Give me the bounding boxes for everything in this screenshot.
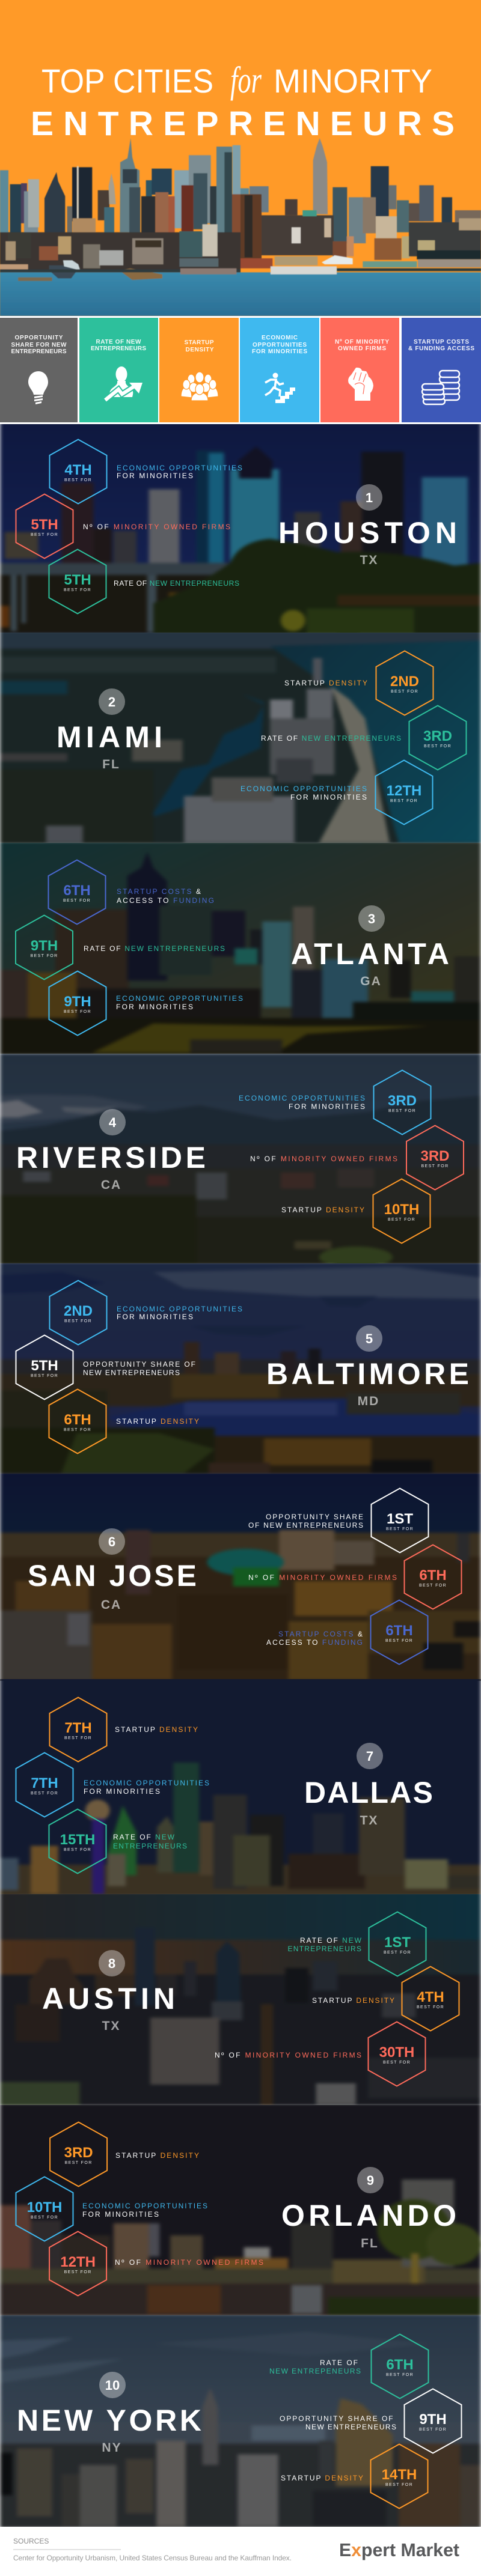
city name: Baltimore: BALTIMORE	[266, 1357, 469, 1391]
label: opportunity share: OPPORTUNITY SHARE OF	[280, 2414, 393, 2423]
panel: Orlando	[0, 2103, 481, 2317]
panel: Houston	[0, 421, 481, 638]
hex: 9th economic opportunities	[49, 971, 106, 1036]
city name: Miami: MIAMI	[57, 720, 162, 754]
right half	[240, 138, 481, 275]
hex: 14th startup density: BEST FOR	[385, 2483, 413, 2487]
hex: 1st opportunity share	[372, 1489, 428, 1552]
icon: raised fist	[348, 368, 373, 401]
label: economic opportunities: ECONOMIC OPPORTUNITIES	[82, 2202, 207, 2210]
tile: startup costs and funding	[402, 318, 481, 422]
hex: 5th opportunity share: 5TH	[31, 1358, 58, 1374]
label: opportunity share	[248, 1513, 363, 1530]
left half	[0, 170, 8, 242]
hex: 6th rate of new entrepreneurs	[372, 2334, 428, 2398]
tile: opportunity share: SHARE FOR NEW	[11, 342, 67, 348]
hex: 3rd minority firms	[406, 1126, 464, 1189]
label: startup costs and funding: STARTUP COSTS &	[117, 887, 201, 896]
hex: 1st opportunity share: 1ST	[387, 1511, 413, 1527]
tile: economic opportunities: OPPORTUNITIES	[253, 342, 307, 348]
hex: 10th startup density	[373, 1179, 430, 1244]
rank badge 7: 7	[366, 1749, 373, 1764]
hex: 3rd economic opportunities: BEST FOR	[388, 1109, 416, 1113]
logo: Expert Market: Expert Market	[339, 2539, 459, 2560]
hex: 6th rate of new entrepreneurs: BEST FOR	[386, 2373, 414, 2377]
sources: Center for Opportunity Urbanism, United States Census Bureau and the Kauffman Index.	[13, 2554, 292, 2562]
hero panel	[0, 0, 481, 316]
sources	[13, 2537, 292, 2562]
label: opportunity share: OPPORTUNITY SHARE OF	[83, 1360, 195, 1368]
hex: 2nd economic opportunities	[49, 1281, 107, 1344]
label: rate of new entrepreneurs: RATE OF NEW ENTREPRENEURS	[114, 579, 239, 588]
hex: 14th startup density	[370, 2444, 428, 2509]
hex: 12th minority firms: 12TH	[60, 2254, 96, 2270]
icon: person climbing stairs	[265, 372, 295, 403]
hex: 3rd minority firms: 3RD	[420, 1148, 450, 1164]
label: economic opportunities	[239, 1094, 365, 1111]
hex: 12th economic opportunities: 12TH	[387, 783, 421, 799]
title: ENTREPRENEURS	[31, 105, 455, 143]
hex: 3rd economic opportunities: 3RD	[388, 1093, 417, 1109]
Orlando photo	[0, 2105, 481, 2315]
label: economic opportunities: FOR MINORITIES	[290, 793, 367, 801]
label: startup costs and funding: ACCESS TO FUNDING	[117, 896, 214, 905]
tile: opportunity share: ENTREPRENEURS	[11, 348, 67, 355]
hex: 30th minority firms: 30TH	[379, 2044, 414, 2061]
tile: startup density: DENSITY	[185, 347, 214, 353]
hex: 5th rate of new entrepreneurs: BEST FOR	[64, 588, 91, 592]
hex: 7th economic opportunities	[16, 1753, 73, 1817]
panel: Dallas	[0, 1677, 481, 1897]
city name: Houston	[278, 516, 457, 567]
label: minority owned firms: Nº OF MINORITY OWNED FIRMS	[250, 1155, 397, 1163]
panel: Atlanta	[0, 841, 481, 1056]
hex: 15th rate of new entrepreneurs: BEST FOR	[64, 1848, 91, 1852]
hex: 9th opportunity share	[404, 2389, 462, 2453]
label: economic opportunities	[84, 1779, 209, 1796]
tile: economic opportunities: ECONOMIC	[262, 335, 298, 341]
city name: Houston: TX	[360, 553, 378, 567]
hex: 4th economic opportunities	[49, 440, 107, 503]
hex: 9th rate of new entrepreneurs: BEST FOR	[30, 954, 58, 958]
New York photo	[0, 2315, 481, 2527]
rank badge 4: 4	[109, 1115, 117, 1130]
label: opportunity share: OF NEW ENTREPRENEURS	[248, 1521, 363, 1530]
panel: Riverside	[0, 1053, 481, 1268]
label: opportunity share	[83, 1360, 195, 1377]
hex: 4th economic opportunities: 4TH	[64, 462, 92, 478]
label: economic opportunities: FOR MINORITIES	[116, 1003, 193, 1011]
label: rate of new entrepreneurs: RATE OF	[320, 2359, 358, 2367]
rank badge 9	[357, 2167, 384, 2193]
city name: Dallas: TX	[360, 1814, 378, 1827]
hex: 4th startup density: BEST FOR	[417, 2005, 444, 2009]
label: economic opportunities: FOR MINORITIES	[117, 1313, 193, 1321]
label: economic opportunities	[117, 1305, 242, 1321]
hex: 14th startup density: 14TH	[382, 2467, 417, 2483]
hex: 1st opportunity share: BEST FOR	[386, 1527, 414, 1531]
hex: 3rd startup density	[50, 2122, 107, 2187]
Dallas photo	[0, 1679, 481, 1894]
label: economic opportunities: FOR MINORITIES	[82, 2210, 159, 2219]
city name: Orlando	[281, 2199, 456, 2250]
panel: Baltimore	[0, 1262, 481, 1476]
label: startup density: STARTUP DENSITY	[115, 1725, 198, 1734]
New York skyline photo	[0, 138, 481, 316]
panel: Miami	[0, 630, 481, 845]
label: rate of new entrepreneurs: RATE OF NEW ENTREPRENEURS	[261, 734, 401, 743]
label: startup density: STARTUP DENSITY	[281, 1206, 364, 1214]
rank badge 8	[99, 1950, 125, 1976]
hex: 2nd startup density	[376, 651, 433, 715]
rank badge 1: 1	[366, 490, 373, 505]
hex: 3rd rate of new entrepreneurs: 3RD	[423, 728, 452, 744]
tile: rate of new entrepreneurs: ENTREPRENEURS	[91, 345, 146, 352]
hex: 2nd startup density: BEST FOR	[391, 690, 418, 694]
hex: 6th startup costs: 6TH	[63, 882, 91, 899]
hex: 10th economic opportunities: 10TH	[27, 2199, 62, 2216]
tile: opportunity share: OPPORTUNITY	[14, 335, 63, 341]
hex: 6th startup costs: 6TH	[385, 1623, 413, 1639]
label: minority owned firms: Nº OF MINORITY OWNED FIRMS	[115, 2258, 263, 2267]
hex: 3rd startup density: BEST FOR	[65, 2161, 93, 2165]
hex: 12th economic opportunities	[375, 761, 433, 824]
label: startup costs and funding: STARTUP COSTS &	[278, 1630, 363, 1638]
hex: 6th startup costs	[370, 1600, 428, 1664]
hex: 9th rate of new entrepreneurs	[16, 916, 73, 979]
panel: San Jose	[0, 1471, 481, 1683]
label: rate of new entrepreneurs: RATE OF NEW	[300, 1936, 362, 1945]
city name: New York: NY	[102, 2441, 122, 2455]
hex: 6th minority firms: 6TH	[419, 1567, 447, 1584]
label: rate of new entrepreneurs	[113, 1833, 187, 1850]
hex: 6th startup costs: BEST FOR	[385, 1639, 413, 1643]
tile: startup density	[159, 318, 239, 422]
city name: Atlanta: GA	[360, 974, 382, 988]
label: opportunity share: NEW ENTREPENEURS	[305, 2423, 396, 2431]
label: startup costs and funding: ACCESS TO FUNDING	[266, 1638, 363, 1647]
title: TOP CITIES	[41, 62, 213, 100]
hex: 2nd economic opportunities: BEST FOR	[64, 1319, 92, 1323]
hex: 5th opportunity share: BEST FOR	[31, 1374, 58, 1378]
hex: 12th minority firms	[49, 2231, 106, 2296]
city name: Austin: TX	[102, 2019, 120, 2033]
label: economic opportunities: ECONOMIC OPPORTUNITIES	[84, 1779, 209, 1787]
label: minority owned firms: Nº OF MINORITY OWNED FIRMS	[83, 523, 230, 531]
rank badge 4	[99, 1109, 126, 1135]
tile: minority owned firms: OWNED FIRMS	[338, 345, 386, 352]
tile: minority owned firms: Nº OF MINORITY	[335, 339, 389, 345]
hex: 7th startup density: BEST FOR	[64, 1736, 92, 1740]
hex: 3rd rate of new entrepreneurs	[409, 705, 467, 770]
rank badge 3	[358, 905, 385, 932]
hex: 5th minority firms: 5TH	[31, 517, 58, 533]
hex: 15th rate of new entrepreneurs	[49, 1809, 106, 1873]
title	[31, 60, 455, 143]
hex: 1st rate of new entrepreneurs	[369, 1912, 426, 1976]
rank badge 9: 9	[367, 2173, 374, 2188]
label: minority owned firms: Nº OF MINORITY OWNED FIRMS	[248, 1573, 397, 1582]
hex: 10th economic opportunities: BEST FOR	[31, 2216, 58, 2220]
title: for	[230, 60, 262, 101]
city name: Austin	[42, 1982, 175, 2033]
city name: Miami	[57, 720, 162, 771]
panel: New York	[0, 2313, 481, 2529]
label: economic opportunities: ECONOMIC OPPORTUNITIES	[240, 785, 367, 793]
hex: 3rd economic opportunities	[374, 1071, 430, 1134]
label: opportunity share: OPPORTUNITY SHARE	[266, 1513, 363, 1521]
hex: 2nd startup density: 2ND	[390, 673, 419, 690]
hex: 6th startup density	[49, 1389, 106, 1454]
hex: 4th startup density: 4TH	[417, 1989, 444, 2005]
city name: Baltimore: MD	[358, 1394, 379, 1408]
hex: 9th opportunity share: 9TH	[419, 2411, 447, 2428]
hex: 4th economic opportunities: BEST FOR	[64, 478, 92, 482]
hex: 6th minority firms	[404, 1545, 462, 1609]
label: economic opportunities: FOR MINORITIES	[117, 472, 193, 480]
label: economic opportunities	[116, 994, 243, 1011]
icon: stacks of coins	[422, 371, 459, 404]
hex: 6th startup density: 6TH	[64, 1412, 91, 1428]
rank badge 5	[356, 1325, 382, 1352]
city name: Dallas	[304, 1776, 433, 1827]
panel: Austin	[0, 1892, 481, 2106]
city name: New York	[17, 2404, 201, 2455]
label: rate of new entrepreneurs: NEW ENTREPENEURS	[269, 2367, 361, 2375]
Atlanta photo	[0, 843, 481, 1054]
hex: 5th minority firms: BEST FOR	[31, 533, 58, 537]
label: economic opportunities: ECONOMIC OPPORTUNITIES	[117, 1305, 242, 1313]
city name: Atlanta	[291, 937, 449, 988]
San Jose photo	[0, 1474, 481, 1681]
label: startup costs and funding	[266, 1630, 363, 1647]
hex: 30th minority firms: BEST FOR	[383, 2061, 411, 2065]
city name: Austin: AUSTIN	[42, 1982, 175, 2016]
icon: person with rising arrow	[105, 366, 142, 400]
hex: 10th economic opportunities	[16, 2177, 73, 2241]
hex: 10th startup density: 10TH	[384, 1201, 419, 1218]
hex: 3rd rate of new entrepreneurs: BEST FOR	[424, 744, 452, 749]
label: rate of new entrepreneurs	[269, 2359, 361, 2375]
hex: 10th startup density: BEST FOR	[388, 1218, 415, 1222]
icon: crowd of people	[181, 372, 218, 401]
hex: 6th rate of new entrepreneurs: 6TH	[386, 2357, 414, 2373]
hex: 3rd startup density: 3RD	[64, 2145, 93, 2161]
hex: 4th startup density	[402, 1967, 459, 2031]
city name: Atlanta: ATLANTA	[291, 937, 449, 971]
hex: 30th minority firms	[368, 2022, 426, 2086]
label: economic opportunities: FOR MINORITIES	[84, 1787, 160, 1796]
label: economic opportunities	[240, 785, 367, 801]
hex: 7th economic opportunities: BEST FOR	[31, 1791, 58, 1796]
label: economic opportunities: ECONOMIC OPPORTUNITIES	[116, 994, 243, 1003]
tile: startup density: STARTUP	[184, 339, 214, 346]
label: rate of new entrepreneurs: RATE OF NEW	[113, 1833, 175, 1841]
rank badge 3: 3	[368, 911, 375, 926]
label: rate of new entrepreneurs: RATE OF NEW ENTREPRENEURS	[84, 944, 225, 953]
label: minority owned firms: Nº OF MINORITY OWNED FIRMS	[215, 2051, 361, 2059]
rank badge 6: 6	[108, 1534, 115, 1549]
footer	[13, 2537, 459, 2562]
hex: 9th economic opportunities: 9TH	[64, 994, 91, 1010]
city name: Houston: HOUSTON	[278, 516, 457, 550]
label: rate of new entrepreneurs	[287, 1936, 362, 1953]
city name: Dallas: DALLAS	[304, 1776, 433, 1809]
hex: 5th minority firms	[16, 494, 73, 559]
rank badge 2: 2	[108, 694, 115, 709]
hex: 7th startup density	[49, 1698, 107, 1761]
tile: startup costs and funding: STARTUP COSTS	[414, 339, 469, 345]
rank badge 2	[99, 688, 125, 715]
rank badge 8: 8	[108, 1956, 115, 1971]
hex: 5th rate of new entrepreneurs: 5TH	[64, 572, 91, 588]
sources: SOURCES	[13, 2537, 49, 2545]
label: startup density: STARTUP DENSITY	[281, 2474, 363, 2482]
city name: Orlando: FL	[361, 2237, 379, 2250]
Miami photo	[0, 633, 481, 843]
hex: 9th opportunity share: BEST FOR	[419, 2428, 447, 2432]
rank badge 6	[99, 1528, 125, 1555]
hex: 1st rate of new entrepreneurs: BEST FOR	[384, 1951, 411, 1955]
hex: 9th rate of new entrepreneurs: 9TH	[31, 938, 58, 954]
hex: 12th minority firms: BEST FOR	[64, 2270, 92, 2274]
label: opportunity share	[280, 2414, 396, 2431]
tile: minority owned firms	[320, 318, 399, 422]
city name: San Jose	[28, 1559, 197, 1612]
city name: Riverside: RIVERSIDE	[16, 1141, 206, 1174]
label: economic opportunities	[117, 464, 242, 480]
label: economic opportunities: ECONOMIC OPPORTUNITIES	[239, 1094, 365, 1102]
tile: rate of new entrepreneurs: RATE OF NEW	[96, 339, 141, 345]
Riverside photo	[0, 1054, 481, 1263]
tile: startup costs and funding: & FUNDING ACCESS	[408, 345, 474, 352]
hex: 2nd economic opportunities: 2ND	[64, 1303, 93, 1319]
hex: 3rd minority firms: BEST FOR	[421, 1164, 449, 1168]
label: startup costs and funding	[117, 887, 214, 905]
label: economic opportunities: ECONOMIC OPPORTUNITIES	[117, 464, 242, 472]
Austin photo	[0, 1894, 481, 2105]
rank badge 10	[99, 2372, 126, 2398]
label: economic opportunities	[82, 2202, 207, 2219]
label: economic opportunities: FOR MINORITIES	[289, 1102, 365, 1111]
Baltimore photo	[0, 1263, 481, 1474]
city name: Riverside	[16, 1141, 206, 1192]
Houston photo	[0, 424, 481, 633]
hero orange background	[0, 0, 481, 316]
label: rate of new entrepreneurs: ENTREPRENEURS	[287, 1945, 361, 1953]
city name: Miami: FL	[102, 758, 120, 771]
label: startup density: STARTUP DENSITY	[312, 1996, 394, 2005]
icon: light bulb	[28, 371, 48, 404]
hex: 6th startup density: BEST FOR	[64, 1428, 91, 1432]
rank badge 10: 10	[105, 2378, 120, 2393]
city name: Riverside: CA	[101, 1178, 121, 1192]
tile: economic opportunities	[240, 318, 319, 422]
hex: 7th startup density: 7TH	[64, 1720, 92, 1736]
hex: 15th rate of new entrepreneurs: 15TH	[60, 1832, 95, 1848]
hex: 5th rate of new entrepreneurs	[49, 549, 106, 614]
hex: 5th opportunity share	[16, 1335, 73, 1400]
tile: economic opportunities: FOR MINORITIES	[252, 348, 307, 355]
label: startup density: STARTUP DENSITY	[284, 679, 367, 687]
label: startup density: STARTUP DENSITY	[115, 2151, 199, 2160]
legend tiles	[0, 318, 481, 422]
rank badge 1	[356, 484, 382, 511]
tile: rate of new entrepreneurs	[79, 318, 158, 422]
city name: Baltimore	[266, 1357, 469, 1408]
title: MINORITY	[274, 62, 432, 100]
label: rate of new entrepreneurs: ENTREPRENEURS	[113, 1842, 187, 1850]
city name: San Jose: SAN JOSE	[28, 1559, 197, 1593]
city name: San Jose: CA	[101, 1598, 121, 1612]
hex: 6th minority firms: BEST FOR	[419, 1584, 447, 1588]
hex: 6th startup costs: BEST FOR	[63, 899, 91, 903]
label: startup density: STARTUP DENSITY	[116, 1417, 199, 1426]
rank badge 5: 5	[366, 1331, 373, 1346]
hex: 6th startup costs	[48, 860, 106, 924]
city name: Orlando: ORLANDO	[281, 2199, 456, 2232]
hex: 9th economic opportunities: BEST FOR	[64, 1010, 91, 1014]
tile: opportunity share	[0, 318, 78, 422]
hex: 12th economic opportunities: BEST FOR	[390, 799, 418, 803]
city name: New York: NEW YORK	[17, 2404, 201, 2437]
rank badge 7	[357, 1743, 383, 1769]
label: opportunity share: NEW ENTREPRENEURS	[83, 1368, 180, 1377]
hex: 7th economic opportunities: 7TH	[31, 1775, 58, 1791]
hex: 1st rate of new entrepreneurs: 1ST	[384, 1934, 411, 1951]
